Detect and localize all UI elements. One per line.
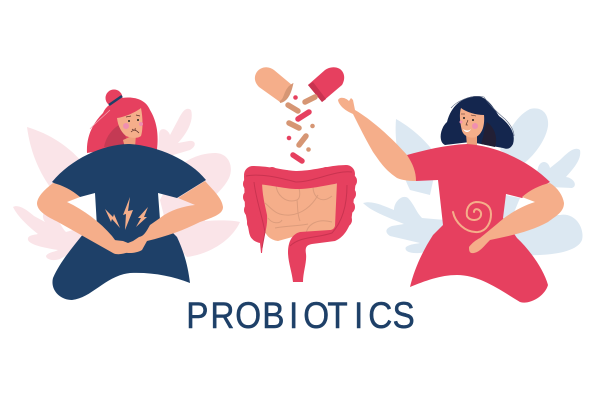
right woman arm and hand on hip [469,183,564,253]
left woman arms and hands [37,181,223,254]
right woman face [460,108,484,146]
capsule half: red [308,67,344,102]
right woman hair [441,96,514,149]
right woman raised arm and hand [338,98,416,181]
left woman with stomach pain [37,90,223,300]
left woman blue top and skirt [52,144,206,300]
blue leaves behind right woman [363,108,583,256]
open probiotic capsule [255,67,344,102]
large intestine [243,167,357,282]
icon: spiral on stomach [453,202,491,232]
small intestine [260,182,340,241]
left woman face [117,108,143,148]
falling probiotic pills [288,96,315,161]
pink leaves behind left woman [13,109,240,260]
capsule half: peach [255,67,292,102]
left woman hair [87,90,158,153]
intestines [243,167,357,282]
icon: three lightning bolts [105,197,148,230]
right woman with calm stomach [338,96,564,303]
large intestine shading [246,172,352,248]
right woman red dress [407,144,550,303]
title: PROBIOTICS [186,295,415,336]
small intestine folds [265,184,332,236]
